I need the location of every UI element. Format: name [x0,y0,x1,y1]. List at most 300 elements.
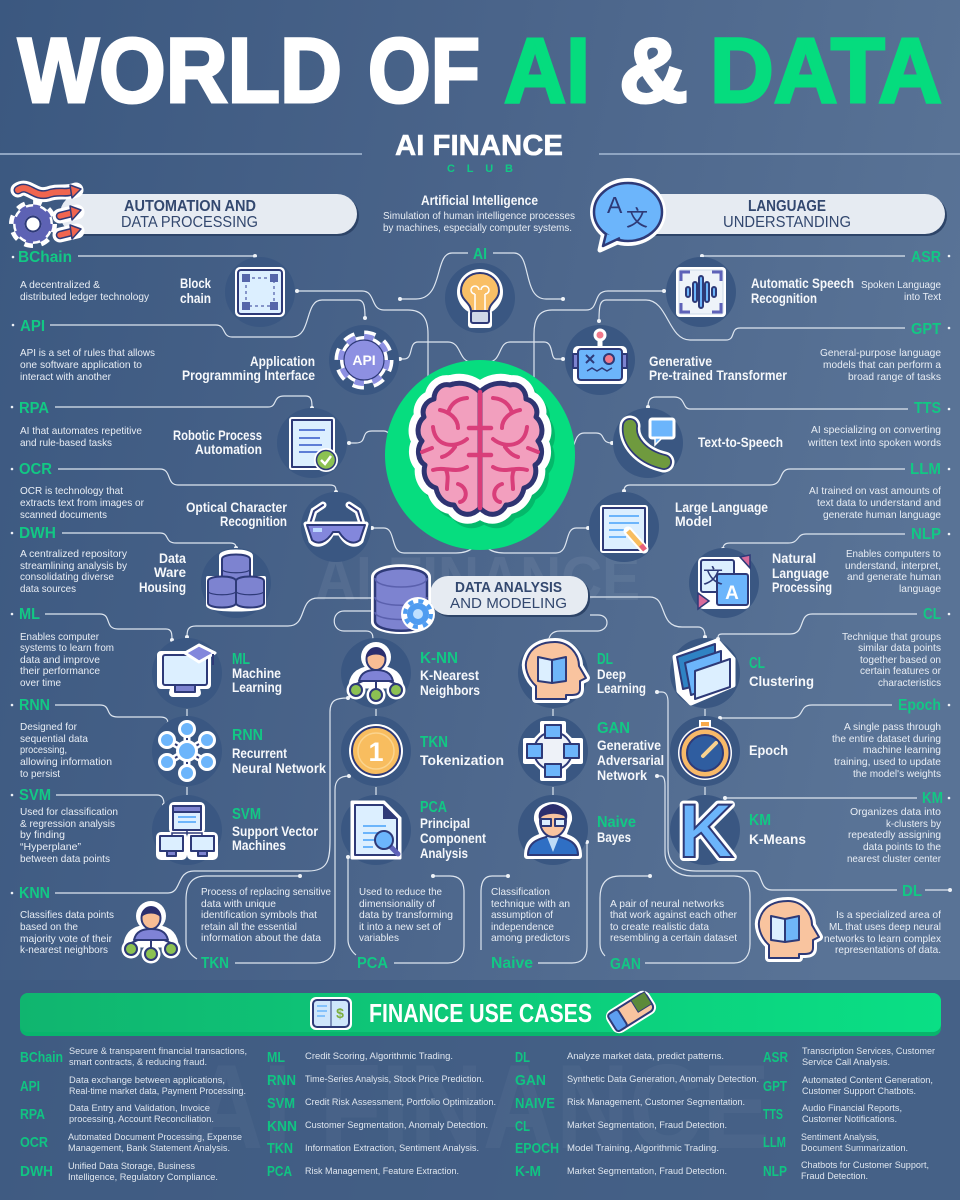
item: DL description: DL [902,883,922,900]
item: CL: Clustering [749,673,814,689]
finance table: column 4: LLM [763,1134,786,1151]
text block: GAN description: GAN [610,956,641,973]
finance table: column 3: K-M [515,1163,541,1180]
finance table: column 1: Intelligence, Regulatory Compliance. [68,1172,218,1183]
banner: Finance Use Cases: FINANCE USE CASES [369,998,592,1028]
item: LLM [589,461,941,562]
icon: KNN person [122,901,180,964]
item: BChain: distributed ledger technology [20,291,150,303]
item: LLM: AI trained on vast amounts of [809,485,941,497]
item: Naive Bayes [518,795,636,865]
logo: AI Finance Club: AI FINANCE [395,130,563,162]
text block: PCA description: dimensionality of [359,898,435,910]
item: TTS: written text into spoken words [807,437,941,449]
item: TKN: TKN [420,734,448,751]
icon: handshake with cash [603,988,659,1036]
item: TTS: Text-to-Speech [698,434,783,450]
item: K-NN: Neighbors [420,682,480,698]
item: ASR: Automatic Speech [751,275,854,291]
icon: blockchain [225,257,295,327]
watermark: footer: AI FINANCE [190,1040,770,1174]
text block: TKN description: retain all the essential [201,921,297,933]
item: Epoch: machine learning [863,744,941,756]
connector end dots [11,254,952,894]
finance table: column 2: ML [267,1049,285,1066]
finance table: column 3: Risk Management, Customer Segmentation. [567,1097,745,1108]
finance table: column 3: Synthetic Data Generation, Anomaly Detection. [567,1074,759,1085]
finance table: column 3: GAN [515,1072,546,1089]
item: KM: k-clusters by [886,818,942,830]
item: ML: Learning [232,679,282,695]
finance table: column 2: Risk Management, Feature Extraction. [305,1166,459,1177]
text block: Artificial Intelligence: by machines, especially computer systems. [383,222,572,234]
finance table: column 4: Customer Support Chatbots. [802,1086,916,1097]
item: RPA: RPA [19,400,49,417]
item: SVM: by finding [20,829,65,841]
item: Epoch [670,697,941,786]
icon: finance book: $ [336,1005,344,1021]
icon: speech waveform [666,257,736,327]
item: OCR: Recognition [220,513,287,529]
item: RNN: Recurrent [232,745,287,761]
item: RPA: and rule-based tasks [20,437,112,449]
item: API: API [20,318,45,335]
icon: translation cards: 文 [703,565,723,588]
item: DWH: A centralized repository [20,548,128,560]
item: KM: Organizes data into [850,806,941,818]
title [18,20,942,122]
item: TTS [613,400,941,478]
text block: Artificial Intelligence: Simulation of human intelligence processes [383,210,575,222]
finance table: column 4: Automated Content Generation, [802,1075,933,1086]
item: CL: similar data points [858,642,941,654]
text block: PCA description: PCA [357,955,388,972]
banner: Data Analysis and Modeling: AND MODELING [450,595,567,612]
text block: Naive description: independence [491,921,554,933]
item: AI: AI [473,246,487,263]
item: CL: CL [923,606,941,623]
item: RNN: RNN [232,727,263,744]
logo: AI Finance Club: CLUB [447,163,513,175]
icon: database stack [201,548,271,618]
item: RPA: Automation [195,441,262,457]
item: SVM: & regression analysis [20,818,115,830]
icon: token coin: 1 [368,737,384,767]
item: NLP: and generate human [847,571,941,583]
watermark: middle: AI FINANCE [315,545,640,614]
icon: networked monitors [152,795,222,865]
logo: AI Finance Club [0,130,960,175]
finance table: column 3: EPOCH [515,1140,559,1157]
item: DWH [19,525,271,618]
item: ML: ML [232,651,250,668]
item: TKN [341,716,504,786]
item: ASR: Recognition [751,290,817,306]
item: RNN [19,697,326,786]
item: KM: K-Means [749,831,806,847]
item: DL description [759,883,942,958]
item: DL description: networks to learn complex [824,933,942,945]
icon: database with gear [371,564,435,634]
item: KNN: Classifies data points [20,909,114,921]
item: CL: characteristics [878,677,941,689]
text block: Naive description: Naive [491,955,533,972]
item: CL [670,606,941,708]
item: PCA: Component [420,830,486,846]
item: BChain: BChain [18,249,72,266]
item: BChain: A decentralized & [20,279,100,291]
finance table: column 4: GPT [763,1078,787,1095]
banner: Finance Use Cases [20,988,941,1036]
finance table: column 3: Market Segmentation, Fraud Detection. [567,1120,727,1131]
text block: Naive description: technique with an [491,898,570,910]
finance table: column 4: NLP [763,1163,787,1180]
item: DL deep learning: Learning [597,680,646,696]
item: PCA: Principal [420,815,470,831]
item: SVM: Machines [232,837,286,853]
item: DWH: data sources [20,583,76,595]
item: DL description: representations of data. [835,944,941,956]
item: NLP: understand, interpret, [845,560,941,572]
item: BChain: Block [180,275,211,291]
finance table: column 4: Transcription Services, Customer [802,1046,935,1057]
icon: adversarial network [518,716,588,786]
item: GPT: models that can perform a [823,359,941,371]
finance table: column 4: Sentiment Analysis, [801,1132,879,1143]
text block: GAN description [610,898,737,973]
finance table: column 2: KNN [267,1118,297,1135]
finance table: column 2: TKN [267,1140,293,1157]
item: RNN: allowing information [20,756,112,768]
item: KNN: majority vote of their [20,933,112,945]
finance table: column 2: SVM [267,1095,295,1112]
item: DWH: DWH [19,525,56,542]
text block: Naive description [491,886,570,972]
icon: token coin [341,716,411,786]
banner: Automation and Data Processing [13,185,359,244]
item: RPA: Robotic Process [173,427,262,443]
icon: finance book [310,997,352,1030]
finance table: column 4: ASR [763,1049,788,1066]
finance table: column 2 [267,1049,496,1180]
item: KM: data points to the [863,841,941,853]
finance table: column 4: Fraud Detection. [801,1171,868,1182]
item: ML: Enables computer [20,631,99,643]
finance table: column 2: Credit Risk Assessment, Portfolio Optimization. [305,1097,496,1108]
finance table: column 1: OCR [20,1134,48,1151]
finance table: column 3: Model Training, Algorithmic Trading. [567,1143,719,1154]
item: GAN: Generative [597,737,661,753]
finance table: column 1: Automated Document Processing, Expense [68,1132,242,1143]
item: SVM [19,787,318,865]
title: WORLD [18,20,342,122]
item: GPT [565,321,941,395]
item: CL: Technique that groups [842,631,941,643]
item: KNN: based on the [20,921,78,933]
icon: monitor and graduation cap [152,638,222,708]
finance table: column 4: Audio Financial Reports, [802,1103,902,1114]
finance table: column 1: Unified Data Storage, Business [68,1161,195,1172]
icon: document with pencil [589,492,659,562]
item: API: one software application to [20,359,142,371]
finance table: column 3: Analyze market data, predict patterns. [567,1051,724,1062]
item: GPT: Generative [649,353,712,369]
item: OCR: OCR is technology that [20,485,123,497]
item: AI [445,246,515,333]
item: NLP: Natural [772,550,816,566]
item: K-NN: K-Nearest [420,667,479,683]
item: NLP [689,526,941,618]
item: API: Application [250,353,315,369]
item: API: Programming Interface [182,367,315,383]
item: Epoch: the entire dataset during [832,733,941,745]
finance table: column 3 [515,1049,759,1180]
item: ML [19,606,282,708]
item: ML: data and improve [20,654,100,666]
finance table: column 3: DL [515,1049,530,1066]
item: TTS: AI specializing on converting [811,424,941,436]
item: CL: certain features or [860,665,941,677]
finance table: column 4: Chatbots for Customer Support, [801,1160,929,1171]
item: Naive Bayes: Naive [597,814,636,831]
icon: document with magnifier [341,795,411,865]
item: GAN [518,716,664,786]
item: DL deep learning [518,638,646,708]
item: ML: Machine [232,665,281,681]
item: Epoch: A single pass through [844,721,941,733]
title: OF [368,20,480,122]
finance table: column 4: TTS [763,1106,783,1123]
finance table: column 1: Real-time market data, Payment Processing. [69,1086,246,1097]
item: ML: systems to learn from [20,642,114,654]
item: GPT: broad range of tasks [848,371,941,383]
item: Naive Bayes: Bayes [597,829,631,845]
text block: PCA description: it into a new set of [359,921,441,933]
connector lines [45,253,950,963]
item: SVM: “Hyperplane” [20,841,81,853]
item: ASR: Spoken Language [861,279,941,291]
finance table: column 2: Time-Series Analysis, Stock Price Prediction. [305,1074,484,1085]
item: Epoch: training, used to update [834,756,941,768]
item: DWH: consolidating diverse [20,571,114,583]
banner: Language Understanding: UNDERSTANDING [723,214,851,231]
item: SVM: between data points [20,853,110,865]
item: GPT: General-purpose language [820,347,941,359]
text block: TKN description [201,886,331,972]
icon: translation cards [689,548,759,618]
item: LLM: generate human language [823,509,941,521]
finance table: column 2: RNN [267,1072,296,1089]
text block: PCA description: data by transforming [359,909,453,921]
banner: Data Analysis and Modeling: DATA ANALYSIS [455,579,562,596]
item: RNN: processing, [20,744,67,756]
finance table: column 3: Market Segmentation, Fraud Detection. [567,1166,727,1177]
item: ML: their performance [20,665,100,677]
finance table: column 1: processing, Account Reconciliation. [69,1114,214,1125]
icon: letter K: K [679,789,734,874]
text block: TKN description: information about the data [201,932,321,944]
item: LLM: text data to understand and [817,497,941,509]
item: SVM: Used for classification [20,806,118,818]
title: DATA [710,20,942,122]
icon: RPA checklist [277,408,347,478]
item: GPT: Pre-trained Transformer [649,367,787,383]
icon: translate speech bubble: 文 [626,206,648,231]
item: NLP: Processing [772,579,832,595]
item: ML: ML [19,606,40,623]
item: ML: over time [20,677,61,689]
item: RPA: AI that automates repetitive [20,425,142,437]
finance table: column 2: Information Extraction, Sentiment Analysis. [305,1143,479,1154]
central brain [385,360,575,550]
item: SVM: SVM [19,787,51,804]
item: KM: nearest cluster center [847,853,941,865]
item: RPA [19,400,347,478]
finance table: column 3: NAIVE [515,1095,555,1112]
finance table: column 1: DWH [20,1163,53,1180]
finance table: column 1: BChain [20,1049,63,1066]
item: GAN: Network [597,767,647,783]
finance table: column 4 [763,1046,935,1182]
icon: gear and arrows [13,185,81,244]
banner: Automation and Data Processing: AUTOMATION AND [124,198,256,215]
item: KM: KM [749,812,771,829]
title: AI [504,20,590,122]
item: TKN: Tokenization [420,752,504,768]
text block: TKN description: identification symbols that [201,909,317,921]
item: API [20,318,399,395]
icon: OCR glasses [301,492,371,562]
item: Epoch: the model's weights [853,768,941,780]
item: OCR: Optical Character [186,499,287,515]
item: KM [670,789,943,874]
icon: API gear: API [352,352,376,368]
banner: Data Analysis and Modeling [371,564,590,634]
icon: neural network nodes [152,716,222,786]
item: NLP: Enables computers to [846,548,941,560]
item: KNN [19,885,180,964]
finance table: column 1: RPA [20,1106,45,1123]
text block: PCA description: Used to reduce the [359,886,442,898]
finance table: column 4: Customer Notifications. [802,1114,897,1125]
item: GAN: GAN [597,720,630,737]
icon: letter K: K [679,789,734,874]
item: NLP: Language [772,565,829,581]
item: RNN: Designed for [20,721,77,733]
icon: light bulb [445,263,515,333]
text block: TKN description: data with unique [201,898,276,910]
finance table: column 3: CL [515,1118,530,1135]
text block: Artificial Intelligence [383,192,575,234]
item: LLM: Model [675,513,712,529]
item: DL description: Is a specialized area of [836,909,941,921]
icon: DL head [759,901,819,958]
finance table: column 1: Management, Bank Statement Analysis. [68,1143,230,1154]
item: RNN: Neural Network [232,760,326,776]
text block: PCA description [357,886,453,972]
item: ASR [666,249,941,327]
text block: Naive description: among predictors [491,932,570,944]
icon: phone and speech bubble [613,408,683,478]
item: PCA: Analysis [420,845,468,861]
item: KM: repeatedly assigning [848,829,941,841]
icon: K-NN person [341,638,411,708]
item: PCA: PCA [420,799,447,816]
item: Epoch: Epoch [749,742,788,758]
item: OCR: scanned documents [20,509,107,521]
icon: translation cards: A [725,583,739,604]
icon: man with glasses [518,795,588,865]
item: BChain: chain [180,290,211,306]
text block: TKN description: Process of replacing sensitive [201,886,331,898]
item: ASR: into Text [904,291,941,303]
item: KNN: k-nearest neighbors [20,944,108,956]
finance table: column 2: Credit Scoring, Algorithmic Trading. [305,1051,453,1062]
item: PCA [341,795,486,865]
text block: TKN description: TKN [201,955,229,972]
item: GPT: GPT [911,321,941,338]
icon: translate speech bubble [590,178,666,250]
text block: GAN description: that work against each other [610,909,737,921]
finance table: column 4: Document Summarization. [801,1143,908,1154]
item: BChain [18,249,295,327]
text block: Naive description: assumption of [491,909,553,921]
text block: Artificial Intelligence: Artificial Intelligence [421,192,538,208]
finance table: column 4: Service Call Analysis. [802,1057,890,1068]
text block: GAN description: to create realistic data [610,921,709,933]
item: RNN: sequential data [20,733,88,745]
text block: GAN description: A pair of neural networks [610,898,724,910]
finance table: column 1: API [20,1078,40,1095]
item: DL deep learning: DL [597,651,613,668]
finance table: column 1: Secure & transparent financial transactions, [69,1046,247,1057]
item: Epoch: Epoch [898,697,941,714]
item: NLP: language [899,583,941,595]
item: DWH: Ware [154,564,186,580]
item: OCR: extracts text from images or [20,497,144,509]
icon: head with book [518,638,588,708]
item: KNN: KNN [19,885,50,902]
item: LLM: Large Language [675,499,768,515]
item: DWH: streamlining analysis by [20,560,128,572]
footer background band [0,980,960,1200]
icon: translate speech bubble: A [607,192,623,218]
text block: Naive description: Classification [491,886,550,898]
banner: Language Understanding: LANGUAGE [748,198,826,215]
banner: Automation and Data Processing: DATA PROCESSING [121,214,258,231]
icon: robot [565,325,635,395]
item: OCR: OCR [19,461,52,478]
icon: stopwatch [670,716,740,786]
finance table: column 1: Data exchange between applications, [69,1075,225,1086]
finance table: column 1: smart contracts, & reducing fraud. [69,1057,207,1068]
item: OCR [19,461,371,562]
item: DWH: Data [159,550,186,566]
item: LLM: LLM [910,461,941,478]
text block: PCA description: variables [359,932,399,944]
item: GAN: Adversarial [597,752,664,768]
text block: GAN description: resembling a certain dataset [610,932,737,944]
item: K-NN: K-NN [420,650,458,667]
item: CL: together based on [860,654,941,666]
item: API: API is a set of rules that allows [20,347,155,359]
finance table: column 2: Customer Segmentation, Anomaly Detection. [305,1120,488,1131]
item: DWH: Housing [139,579,186,595]
item: TTS: TTS [914,400,941,417]
item: DL description: ML that uses deep neural [829,921,941,933]
item: KM: KM [922,790,943,807]
item: K-NN [341,638,480,708]
